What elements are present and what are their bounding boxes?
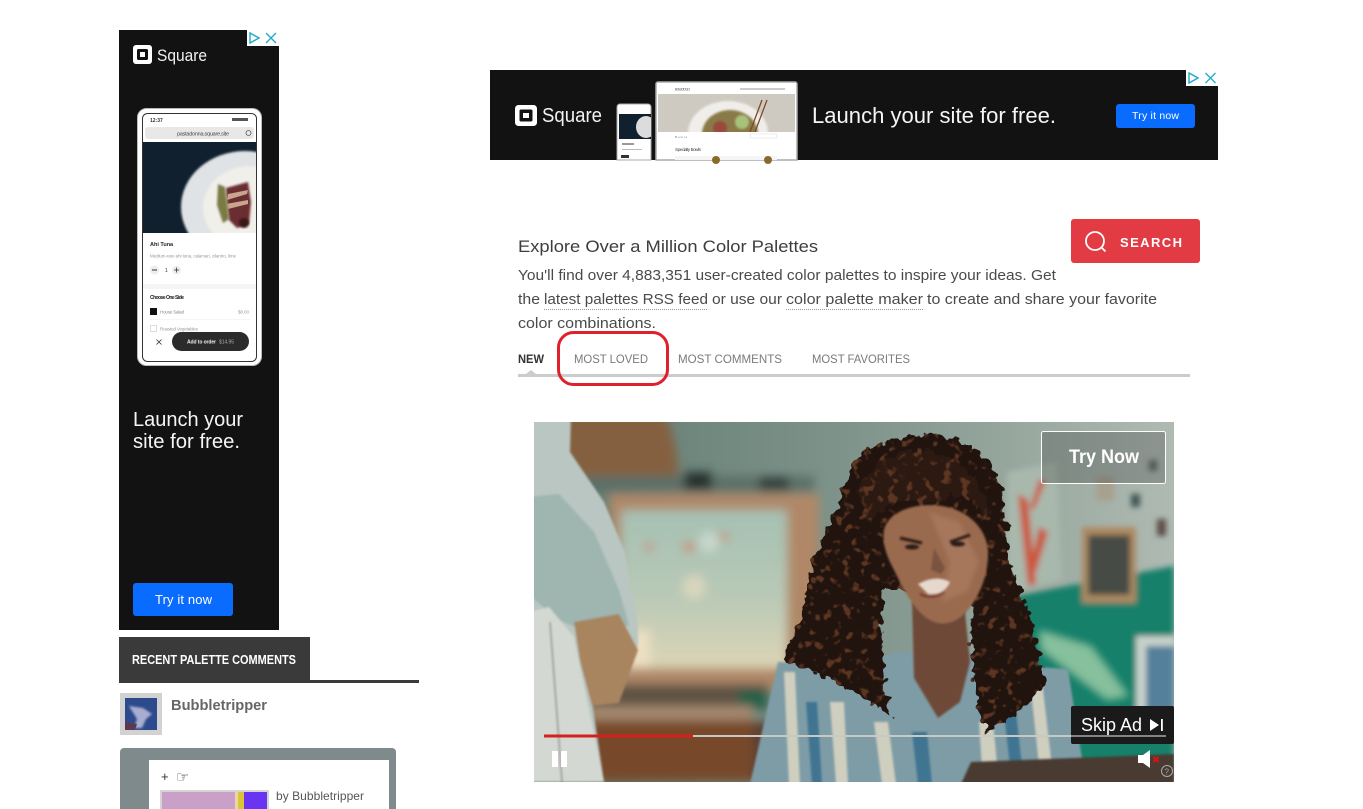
page canvas	[119, 30, 1218, 809]
ad headline	[133, 409, 243, 453]
Square logo	[515, 105, 602, 127]
comment card: ☞	[176, 768, 189, 786]
phone mockup: House Salad	[160, 310, 184, 314]
search button: SEARCH	[1120, 235, 1182, 250]
banner ad: Square	[490, 70, 1218, 165]
commenter name: Bubbletripper	[171, 698, 267, 714]
ad button: Try it now	[1132, 110, 1179, 122]
phone preview	[617, 104, 656, 160]
panel: recent palette comments	[119, 637, 419, 809]
phone mockup: Roasted Vegetables	[160, 326, 199, 332]
tabs: NEW	[518, 354, 544, 366]
intro paragraph: to create and share your favorite	[927, 291, 1157, 308]
section heading	[119, 637, 419, 683]
desktop site preview: Specialty Bowls	[675, 147, 702, 152]
callout: red highlight around Most Loved	[558, 332, 668, 384]
face features	[900, 535, 970, 597]
icon: pause	[552, 751, 567, 767]
icon: ad choices	[247, 30, 279, 46]
Skip Ad button: Skip Ad	[1081, 715, 1142, 735]
ad button	[1116, 104, 1195, 128]
desktop site preview: Bowls	[675, 135, 688, 139]
video ad	[529, 412, 1174, 784]
phone mockup: Medium-rare ahi tuna, calamari, cilantro, lime	[150, 254, 236, 258]
ad button: Try it now	[155, 592, 213, 607]
ad button	[133, 583, 233, 616]
neck	[912, 602, 970, 718]
phone mockup: 1	[165, 268, 168, 274]
tabs: MOST FAVORITES	[812, 354, 910, 366]
intro paragraph: You'll find over 4,883,351 user-created color palettes to inspire your ideas. Get	[518, 267, 1057, 284]
blurred kitchen background	[559, 412, 819, 782]
hair	[783, 435, 1044, 731]
tabs	[518, 354, 1190, 377]
Square logo: Square	[157, 46, 207, 65]
phone mockup: $14.95	[219, 340, 234, 346]
intro paragraph: color combinations.	[518, 315, 656, 332]
phone mockup: 12:37	[150, 118, 163, 124]
icon: ad choices	[1186, 70, 1218, 86]
food photo	[143, 142, 256, 233]
intro paragraph	[518, 267, 1157, 332]
ad headline: Launch your site for free.	[812, 103, 1056, 128]
Skip Ad button	[1071, 706, 1174, 744]
bangs	[856, 451, 990, 526]
figure at left in protective suit	[529, 417, 638, 782]
tabs: MOST LOVED	[574, 354, 648, 366]
icon: magnifier	[1086, 232, 1106, 252]
intro paragraph: latest palettes RSS feed	[544, 291, 708, 308]
face	[883, 505, 988, 624]
heading: Explore Over a Million Color Palettes	[518, 237, 818, 256]
progress bar	[544, 734, 1071, 738]
intro paragraph: color palette maker	[786, 291, 923, 308]
icon: help	[1162, 766, 1172, 776]
tabs: MOST COMMENTS	[678, 354, 782, 366]
ad headline: site for free.	[133, 431, 240, 453]
phone mockup: Ahi Tuna	[150, 242, 174, 248]
Square logo: Square	[542, 105, 602, 127]
comment card: by Bubbletripper	[276, 789, 364, 803]
intro paragraph: the	[518, 291, 540, 308]
palette swatch	[160, 790, 269, 809]
shirt	[750, 652, 1086, 784]
icon: help: ?	[1164, 768, 1170, 776]
avatar	[120, 693, 162, 735]
ad headline: Launch your	[133, 409, 243, 431]
phone mockup: Add to order	[187, 340, 216, 346]
section heading: RECENT PALETTE COMMENTS	[132, 653, 296, 667]
phone mockup	[137, 108, 262, 366]
icon: muted speaker	[1138, 750, 1158, 768]
phone mockup: Choose One Side	[150, 295, 184, 301]
intro paragraph: or use our	[712, 291, 782, 308]
search button	[1071, 219, 1200, 263]
comment card: +	[161, 769, 169, 784]
phone mockup: pastadonna.square.site	[177, 132, 229, 138]
Try Now button	[1042, 432, 1166, 484]
phone mockup: $8.00	[238, 310, 249, 314]
Try Now button: Try Now	[1069, 447, 1139, 468]
laptop	[961, 754, 1174, 784]
desktop site preview	[656, 82, 797, 165]
woman with curly hair	[750, 435, 1174, 784]
desktop site preview: BOWL TO GO	[675, 88, 690, 92]
vertical ad: Square	[119, 30, 279, 630]
comment card	[120, 748, 396, 809]
Square logo	[133, 45, 207, 65]
video scene	[529, 412, 1174, 784]
